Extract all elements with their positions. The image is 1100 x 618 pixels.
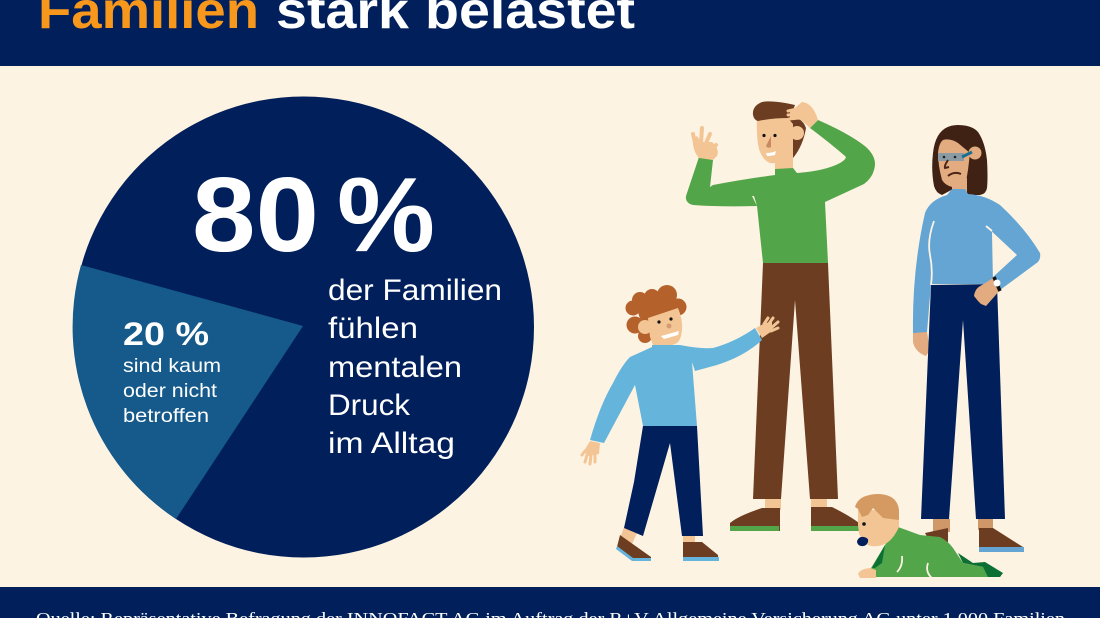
text: der Familien fühlen mentalen Druck im Alltag: Druck xyxy=(328,389,411,422)
illustration: woman in blue sweater xyxy=(913,125,1040,552)
man sweater xyxy=(686,120,875,263)
woman nose and mouth xyxy=(945,160,961,176)
woman sweater xyxy=(913,189,1040,333)
big number: 80 %: 80 xyxy=(192,156,319,274)
woman hair xyxy=(932,125,988,195)
baby hand xyxy=(858,568,876,578)
text: der Familien fühlen mentalen Druck im Alltag: der Familien xyxy=(328,274,502,307)
boy hair xyxy=(626,285,686,343)
text: 20 % sind kaum oder nicht betroffen: betroffen xyxy=(123,405,209,427)
text: 20 % sind kaum oder nicht betroffen: sind kaum xyxy=(123,355,221,377)
text: der Familien fühlen mentalen Druck im Alltag: mentalen xyxy=(328,351,462,384)
woman trousers xyxy=(921,284,1005,519)
man right hand on head xyxy=(788,102,818,128)
text: der Familien fühlen mentalen Druck im Alltag xyxy=(328,274,502,460)
man facial features xyxy=(762,134,766,137)
woman hand with watch xyxy=(974,277,1000,306)
baby foot xyxy=(958,553,1003,577)
pie chart: 80 % / 20 % xyxy=(73,96,534,558)
text: der Familien fühlen mentalen Druck im Alltag: fühlen xyxy=(328,312,418,345)
baby head xyxy=(858,510,899,546)
boy ankles and shoes xyxy=(620,527,695,545)
woman glasses xyxy=(938,152,972,161)
man trousers xyxy=(753,263,838,499)
man left hand xyxy=(693,128,718,160)
baby pacifier xyxy=(857,537,868,546)
boy hand on trousers xyxy=(756,318,778,338)
big number: 80 % xyxy=(192,156,435,274)
illustration: boy in blue sweater xyxy=(582,285,778,561)
big number: 80 %: % xyxy=(337,156,435,274)
boy sweater xyxy=(590,328,762,443)
title xyxy=(38,0,635,40)
boy face xyxy=(648,308,682,347)
text: der Familien fühlen mentalen Druck im Alltag: im Alltag xyxy=(328,427,455,460)
baby body xyxy=(871,527,988,577)
man shoes xyxy=(765,498,827,510)
illustration: crawling baby xyxy=(855,494,1003,578)
header band xyxy=(0,0,1100,66)
pie slice: 20 % xyxy=(73,265,303,519)
text: 20 % sind kaum oder nicht betroffen xyxy=(123,316,221,427)
text: 20 % sind kaum oder nicht betroffen: oder nicht xyxy=(123,380,218,402)
footer band xyxy=(0,587,1100,618)
boy hanging hand xyxy=(582,441,600,464)
text: 20 % sind kaum oder nicht betroffen: 20 % xyxy=(123,316,209,352)
man neck and face xyxy=(775,150,793,172)
woman face xyxy=(938,139,970,187)
illustration: man in green sweater xyxy=(686,101,875,531)
man hair xyxy=(753,101,795,121)
boy trousers xyxy=(624,426,703,536)
woman neck xyxy=(952,178,967,194)
woman hanging hand xyxy=(913,332,930,356)
woman shoes xyxy=(933,519,993,532)
